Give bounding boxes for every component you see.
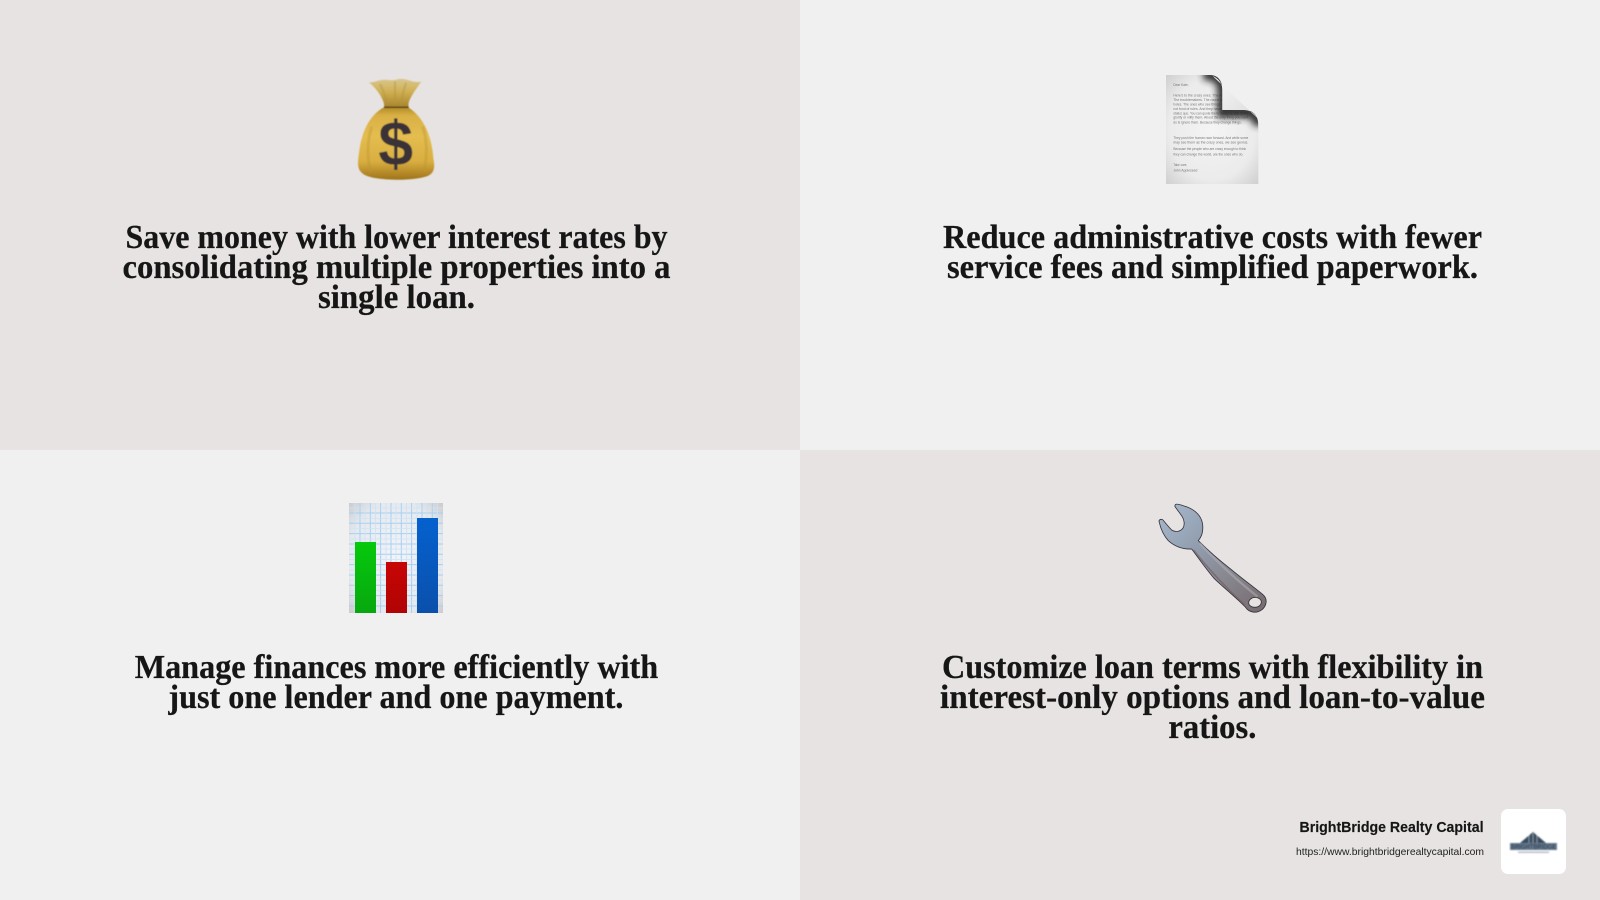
panel: manage finances [0, 450, 800, 900]
panel: lower interest rates [0, 0, 800, 450]
brand url: https://www.brightbridgerealtycapital.com [1296, 846, 1484, 858]
heading: lower interest rates [122, 219, 671, 316]
heading: customize loan terms: ratios. [1168, 709, 1256, 746]
icon: page with curl: glorify or vilify them. About the only thing you can't [1173, 116, 1248, 120]
brand name: BrightBridge Realty Capital [1300, 820, 1484, 836]
icon: money bag [358, 79, 434, 180]
icon: bar chart [349, 503, 443, 613]
bar: red [386, 562, 407, 613]
logo card [1501, 809, 1566, 874]
panel: customize loan terms [800, 450, 1600, 900]
icon: page with curl: Here's to the crazy ones. The misfits. The rebels. [1173, 93, 1248, 97]
bar: blue [417, 518, 438, 613]
icon: page with curl: do is ignore them. Because they change things. [1173, 120, 1242, 124]
icon: page with curl: Because the people who are crazy enough to think [1173, 147, 1246, 151]
heading: administrative costs: service fees and simplified paperwork. [947, 249, 1478, 286]
icon: page with curl: holes. The ones who see things differently. They're [1173, 103, 1248, 107]
icon: logo roof: BRIGHTBRIDGE [1511, 844, 1556, 851]
bar: green [355, 542, 376, 613]
heading: lower interest rates: single loan. [318, 279, 475, 316]
icon: page with curl: Take care, [1173, 163, 1187, 167]
icon: wrench [1159, 504, 1266, 612]
heading: manage finances [135, 649, 659, 716]
icon: page with curl: Dear Kate, [1173, 83, 1189, 87]
icon: page with curl: They push the human race forward. And while some [1173, 136, 1248, 140]
heading: administrative costs: Reduce administrative costs with fewer [943, 219, 1482, 256]
heading: manage finances: Manage finances more efficiently with [135, 649, 659, 686]
icon: money bag: $ [378, 109, 413, 179]
icon: page with curl: may see them as the crazy ones, we see genius. [1173, 141, 1248, 145]
heading: manage finances: just one lender and one payment. [167, 679, 623, 716]
icon: page with curl: they can change the world, are the ones who do. [1173, 152, 1243, 156]
icon: page with curl: John Appleseed [1173, 168, 1197, 172]
heading: lower interest rates: consolidating multiple properties into a [122, 249, 671, 286]
panel: administrative costs [800, 0, 1600, 450]
icon: page with curl: status quo. You can quote them, disagree with them, [1173, 111, 1248, 115]
heading: customize loan terms: Customize loan terms with flexibility in [942, 649, 1483, 686]
icon: page with curl [1166, 73, 1260, 184]
icon: page with curl: The troublemakers. The round pegs in the square [1173, 98, 1248, 102]
heading: customize loan terms [940, 649, 1485, 746]
heading: customize loan terms: interest-only options and loan-to-value [940, 679, 1485, 716]
heading: administrative costs [943, 219, 1482, 286]
icon: page with curl: not fond of rules. And they have no respect for the [1173, 107, 1248, 111]
heading: lower interest rates: Save money with lower interest rates by [126, 219, 668, 256]
